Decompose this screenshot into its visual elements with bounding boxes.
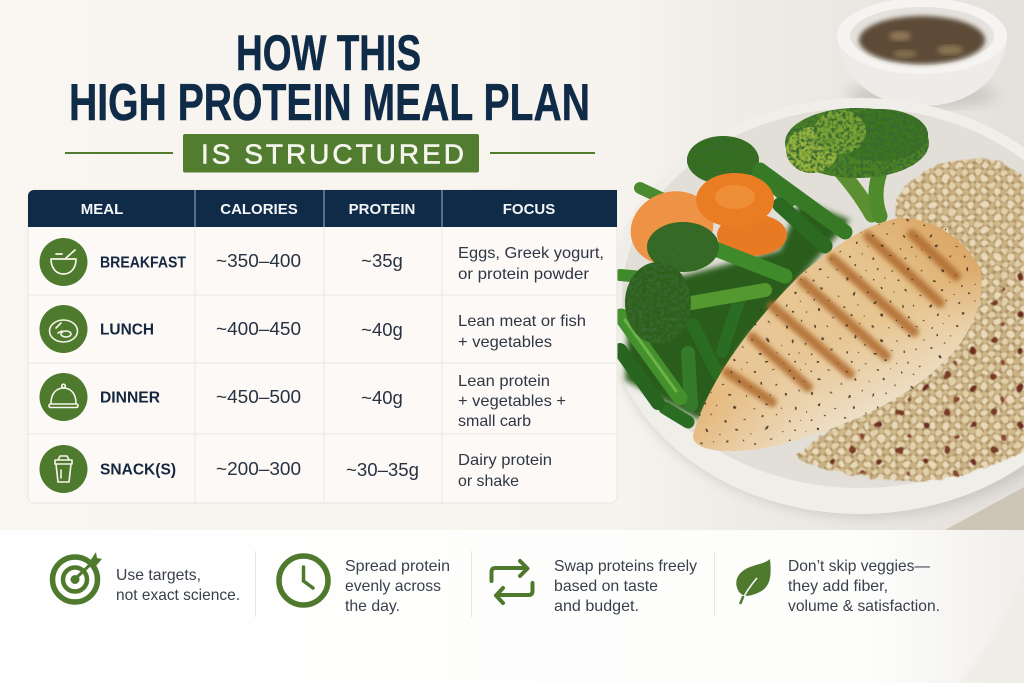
tip: targets: Use targets, bbox=[116, 567, 201, 584]
tip: swap proteins: based on taste bbox=[554, 578, 658, 595]
table header: FOCUS bbox=[503, 201, 555, 218]
tip: spread protein: Spread protein bbox=[345, 558, 450, 575]
photo: plated meal bbox=[606, 98, 1024, 516]
tip: veggies: volume & satisfaction. bbox=[788, 598, 940, 615]
tip: targets bbox=[52, 552, 240, 604]
table body bbox=[28, 190, 617, 503]
row: dinner: ~40g bbox=[361, 387, 403, 408]
photo: small pepper bowl bbox=[837, 0, 1007, 108]
row: lunch: ~400–450 bbox=[216, 318, 301, 339]
row: dinner: ~450–500 bbox=[216, 386, 301, 407]
icon: salad bbox=[40, 305, 88, 353]
title: HIGH PROTEIN MEAL PLAN bbox=[69, 74, 590, 132]
broccoli crowns front bbox=[625, 222, 785, 344]
grill marks bbox=[727, 234, 956, 402]
row: dinner: Lean protein bbox=[458, 373, 550, 390]
tip: spread protein bbox=[279, 556, 450, 615]
row: dinner: + vegetables + bbox=[458, 393, 566, 410]
row: snacks: Dairy protein bbox=[458, 452, 552, 469]
row: lunch: Lean meat or fish bbox=[458, 313, 586, 330]
subtitle badge bbox=[65, 134, 595, 172]
tip: veggies bbox=[736, 558, 940, 615]
bottom band bbox=[0, 530, 1024, 683]
row: dinner: DINNER bbox=[100, 390, 160, 406]
row: breakfast: Eggs, Greek yogurt, bbox=[458, 245, 604, 262]
row: snacks bbox=[40, 445, 552, 493]
icon: swap arrows bbox=[492, 561, 532, 603]
tip: swap proteins bbox=[492, 558, 697, 615]
tips row bbox=[52, 551, 940, 617]
background bbox=[0, 0, 1024, 530]
row: dinner bbox=[40, 373, 566, 430]
green beans bbox=[620, 170, 845, 422]
row: snacks: SNACK(S) bbox=[100, 462, 176, 478]
table header: CALORIES bbox=[220, 201, 298, 218]
row: lunch: + vegetables bbox=[458, 334, 552, 351]
table header: MEAL bbox=[81, 201, 123, 218]
row: lunch: ~40g bbox=[361, 319, 403, 340]
row: breakfast: or protein powder bbox=[458, 266, 590, 283]
tip: spread protein: the day. bbox=[345, 598, 400, 615]
row: breakfast: ~350–400 bbox=[216, 250, 301, 271]
carrots bbox=[620, 173, 787, 276]
chicken breast bbox=[693, 218, 982, 451]
tip: spread protein: evenly across bbox=[345, 578, 441, 595]
tip: swap proteins: Swap proteins freely bbox=[554, 558, 697, 575]
plate bbox=[606, 98, 1024, 516]
tip: veggies: they add fiber, bbox=[788, 578, 888, 595]
title: HOW THIS bbox=[236, 25, 421, 81]
tip: veggies: Don’t skip veggies— bbox=[788, 558, 930, 575]
table header bbox=[28, 190, 617, 227]
row: lunch: LUNCH bbox=[100, 322, 154, 338]
row: snacks: ~200–300 bbox=[216, 458, 301, 479]
icon: shaker bbox=[40, 445, 88, 493]
icon: leaf bbox=[736, 559, 771, 603]
row: dinner: small carb bbox=[458, 413, 531, 430]
broccoli crowns back bbox=[687, 108, 929, 184]
icon: target bbox=[52, 552, 102, 602]
subtitle badge: IS STRUCTURED bbox=[201, 138, 464, 170]
icon: clock bbox=[279, 556, 328, 605]
meal table bbox=[28, 190, 617, 503]
row: breakfast bbox=[40, 238, 604, 286]
row: lunch bbox=[40, 305, 586, 353]
quinoa bbox=[797, 158, 1024, 481]
dark vegetable mass bbox=[625, 200, 850, 420]
row: snacks: or shake bbox=[458, 473, 519, 490]
table header: PROTEIN bbox=[349, 201, 415, 218]
tip: swap proteins: and budget. bbox=[554, 598, 639, 615]
title bbox=[69, 25, 590, 132]
icon: cloche bbox=[40, 373, 88, 421]
row: snacks: ~30–35g bbox=[346, 459, 419, 480]
photo: napkin corner bbox=[945, 487, 1024, 530]
icon: bowl bbox=[40, 238, 88, 286]
tip: targets: not exact science. bbox=[116, 587, 240, 604]
row: breakfast: ~35g bbox=[361, 250, 403, 271]
fabric fold bbox=[960, 575, 1024, 683]
broccoli stems bbox=[745, 160, 885, 216]
row: breakfast: BREAKFAST bbox=[100, 254, 186, 272]
